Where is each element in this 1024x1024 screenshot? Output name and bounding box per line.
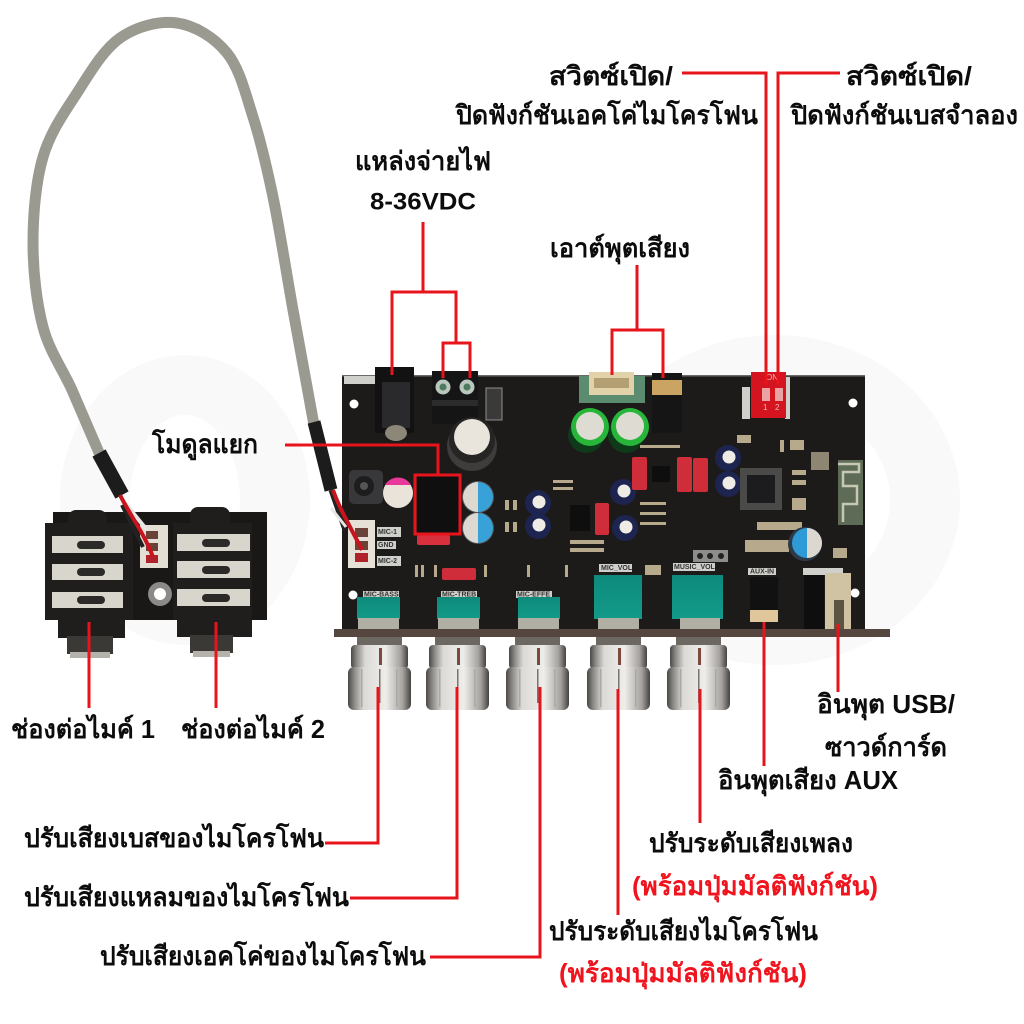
- label: mic treble: ปรับเสียงแหลมของไมโครโฟน: [24, 881, 349, 912]
- potentiometer collars: [358, 618, 720, 630]
- silkscreen labels: AUX-IN: [750, 568, 774, 575]
- silkscreen labels: [344, 376, 843, 598]
- label: mic volume: ปรับระดับเสียงไมโครโฟน: [549, 915, 818, 946]
- audio cable: [33, 22, 362, 557]
- blue capacitor right: [788, 527, 822, 561]
- callout lines: [89, 73, 840, 957]
- silkscreen labels: MIC-1: [378, 529, 397, 536]
- wireless antenna: [838, 460, 863, 525]
- front metal panel: [334, 629, 890, 637]
- silkscreen labels: MIC-EFFE: [517, 591, 550, 598]
- jack module circuit board: [53, 512, 267, 620]
- silkscreen labels: MIC-TREB: [442, 591, 476, 598]
- mic connector: [348, 520, 375, 568]
- red film capacitors: [442, 457, 708, 580]
- label: bass switch: สวิตซ์เปิด/: [846, 61, 972, 91]
- background watermark: [60, 335, 960, 665]
- DIP switch: [742, 372, 790, 419]
- label: audio output: เอาต์พุตเสียง: [550, 233, 690, 265]
- label: mic port 1: ช่องต่อไมค์ 1: [11, 713, 155, 744]
- right jack socket: [173, 507, 252, 657]
- blue capacitors pair: [462, 481, 494, 544]
- label: echo switch: สวิตซ์เปิด/: [549, 61, 673, 91]
- label: music volume: (พร้อมปุ่มมัลติฟังก์ชัน): [632, 871, 878, 903]
- main processor chip: [740, 468, 782, 510]
- DIP switch: 1: [763, 403, 768, 412]
- label: separate module: โมดูลแยก: [151, 428, 258, 461]
- label: music volume: [632, 828, 878, 903]
- label: mic echo: ปรับเสียงเอคโค่ของไมโครโฟน: [100, 940, 426, 971]
- inductor: [349, 470, 383, 504]
- label: power supply: แหล่งจ่ายไฟ: [355, 145, 491, 176]
- small chips: [570, 466, 670, 531]
- right jack terminals: [177, 534, 250, 606]
- DIP switch: ON: [766, 373, 778, 382]
- blue capacitors centre: [525, 445, 741, 541]
- pink capacitor: [383, 477, 413, 508]
- pin header: [693, 550, 728, 562]
- AUX connector: [750, 577, 778, 622]
- small resistors: [415, 435, 847, 577]
- silkscreen labels: MIC-2: [378, 558, 397, 565]
- label: music volume: ปรับระดับเสียงเพลง: [649, 828, 853, 858]
- potentiometers: [357, 575, 723, 619]
- USB and card socket: [804, 573, 851, 630]
- label: bass switch: [790, 61, 1018, 130]
- module connector: [140, 525, 168, 568]
- label: bass switch: ปิดฟังก์ชันเบสจำลอง: [790, 100, 1018, 130]
- label: mic volume: (พร้อมปุ่มมัลติฟังก์ชัน): [559, 958, 807, 990]
- label: mic bass: ปรับเสียงเบสของไมโครโฟน: [24, 822, 324, 853]
- label: echo switch: ปิดฟังก์ชันเอคโค่ไมโครโฟน: [455, 99, 758, 130]
- label: USB input: อินพุต USB/: [817, 689, 955, 721]
- label: USB input: [817, 689, 955, 762]
- audio output connector: [579, 372, 645, 403]
- silkscreen labels: MUSIC_VOL: [674, 564, 716, 571]
- left jack socket: [45, 510, 133, 658]
- label: power supply: 8-36VDC: [370, 188, 476, 215]
- screw terminal: [432, 371, 478, 424]
- label: mic port 2: ช่องต่อไมค์ 2: [181, 713, 325, 744]
- left jack terminals: [52, 536, 123, 608]
- mounting hole: [148, 582, 172, 606]
- label: mic volume: [549, 915, 818, 990]
- audio jack: [652, 373, 682, 433]
- label: power supply: [355, 145, 491, 215]
- label: echo switch: [455, 61, 758, 130]
- label: USB input: ซาวด์การ์ด: [825, 732, 947, 762]
- silkscreen labels: MIC_VOL: [601, 565, 633, 572]
- separate module chip: [417, 476, 459, 533]
- green capacitors: [568, 408, 649, 453]
- silkscreen labels: MIC-BASS: [364, 591, 399, 598]
- DIP switch: 2: [775, 403, 780, 412]
- red capacitor bar: [417, 535, 450, 545]
- small switch: [486, 388, 502, 420]
- main circuit board: [334, 367, 890, 637]
- antenna socket: [811, 452, 829, 470]
- control knobs: [348, 637, 730, 710]
- board base: [342, 375, 865, 632]
- mounting holes: [348, 398, 860, 600]
- DC power jack: [375, 367, 414, 441]
- jack module: [45, 507, 267, 658]
- label: AUX input: อินพุตเสียง AUX: [718, 765, 899, 797]
- large capacitor: [447, 417, 497, 471]
- silkscreen labels: GND: [378, 542, 394, 549]
